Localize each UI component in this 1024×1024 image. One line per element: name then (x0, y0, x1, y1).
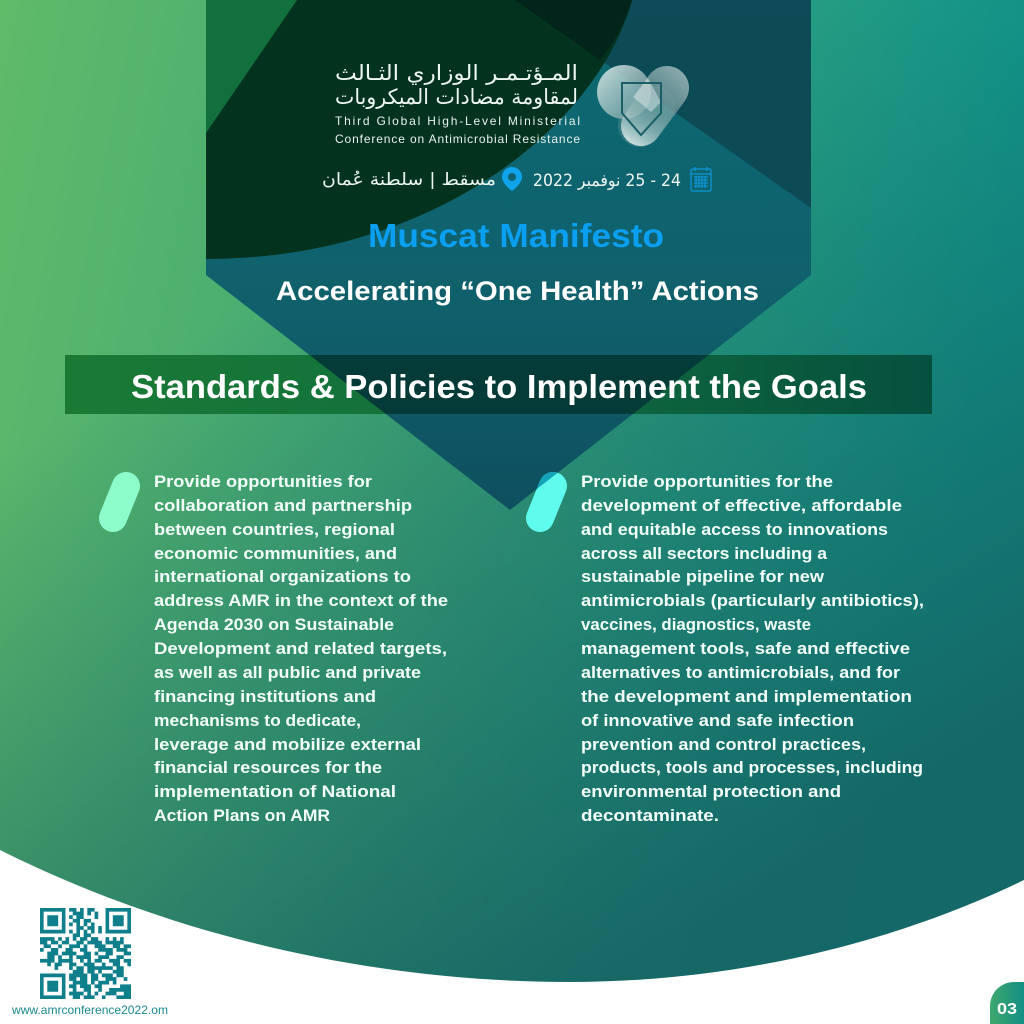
icon: right pill bullet (540, 486, 553, 518)
text block: right column: vaccines, diagnostics, waste (581, 615, 811, 634)
text block: left column: address AMR in the context of the (154, 591, 448, 610)
text block: right column: products, tools and processes, including (581, 758, 923, 777)
heading: Accelerating One Health Actions: Accelerating “One Health” Actions (276, 276, 759, 306)
text block: left column: financing institutions and (154, 687, 376, 706)
logo mark (597, 65, 667, 135)
text block: right column: management tools, safe and effective (581, 639, 910, 658)
text block: left column: implementation of National (154, 782, 396, 801)
heading: Muscat Manifesto: Muscat Manifesto (368, 217, 664, 254)
location text: مسقط | سلطنة عُمان (322, 170, 496, 190)
section banner (65, 355, 932, 414)
text block: right column: sustainable pipeline for new (581, 567, 825, 586)
page number badge: 03 (997, 1001, 1017, 1018)
text block: right column: decontaminate. (581, 806, 719, 825)
text block: left column: mechanisms to dedicate, (154, 711, 361, 730)
English conference title (335, 114, 580, 146)
text block: right column: Provide opportunities for the (581, 472, 833, 491)
text block: left column: as well as all public and private (154, 663, 421, 682)
icon: left pill bullet (113, 486, 126, 518)
text block: right column: prevention and control practices, (581, 735, 866, 754)
Arabic conference title: المـؤتـمـر الوزاري الثـالث (335, 61, 578, 85)
page number badge (990, 982, 1024, 1024)
English conference title: Conference on Antimicrobial Resistance (335, 132, 580, 146)
text block: left column: leverage and mobilize external (154, 735, 421, 754)
text block: right column: environmental protection and (581, 782, 841, 801)
QR code (40, 910, 131, 997)
text block: left column: Development and related targets, (154, 639, 447, 658)
text block: left column: between countries, regional (154, 520, 395, 539)
date text: 24 - 25 نوفمبر 2022 (533, 171, 681, 191)
icon: location pin (502, 167, 522, 191)
text block: left column: Action Plans on AMR (154, 806, 330, 825)
text block: left column: collaboration and partnership (154, 496, 412, 515)
white bottom curve (0, 850, 1024, 1024)
text block: right column: and equitable access to innovations (581, 520, 888, 539)
text block: right column: of innovative and safe infection (581, 711, 854, 730)
English conference title: Third Global High-Level Ministerial (335, 114, 580, 128)
text block: left column: financial resources for the (154, 758, 382, 777)
text block: left column: Agenda 2030 on Sustainable (154, 615, 394, 634)
text block: right column: antimicrobials (particularly antibiotics), (581, 591, 924, 610)
section banner: Standards & Policies to Implement the Goals (131, 368, 867, 405)
text block: left column: international organizations to (154, 567, 411, 586)
Arabic conference title: لمقاومة مضادات الميكروبات (335, 85, 578, 109)
Arabic conference title (335, 61, 578, 109)
text block: left column: economic communities, and (154, 544, 397, 563)
text block: left column (154, 472, 448, 825)
text block: right column: the development and implementation (581, 687, 912, 706)
text block: left column: Provide opportunities for (154, 472, 372, 491)
icon: calendar (691, 167, 711, 191)
text block: right column: alternatives to antimicrobials, and for (581, 663, 900, 682)
text block: right column: across all sectors including a (581, 544, 828, 563)
panel: header pentagon (206, 0, 811, 510)
text block: right column: development of effective, affordable (581, 496, 902, 515)
website url: www.amrconference2022.om (11, 1003, 168, 1017)
text block: right column (581, 472, 924, 825)
